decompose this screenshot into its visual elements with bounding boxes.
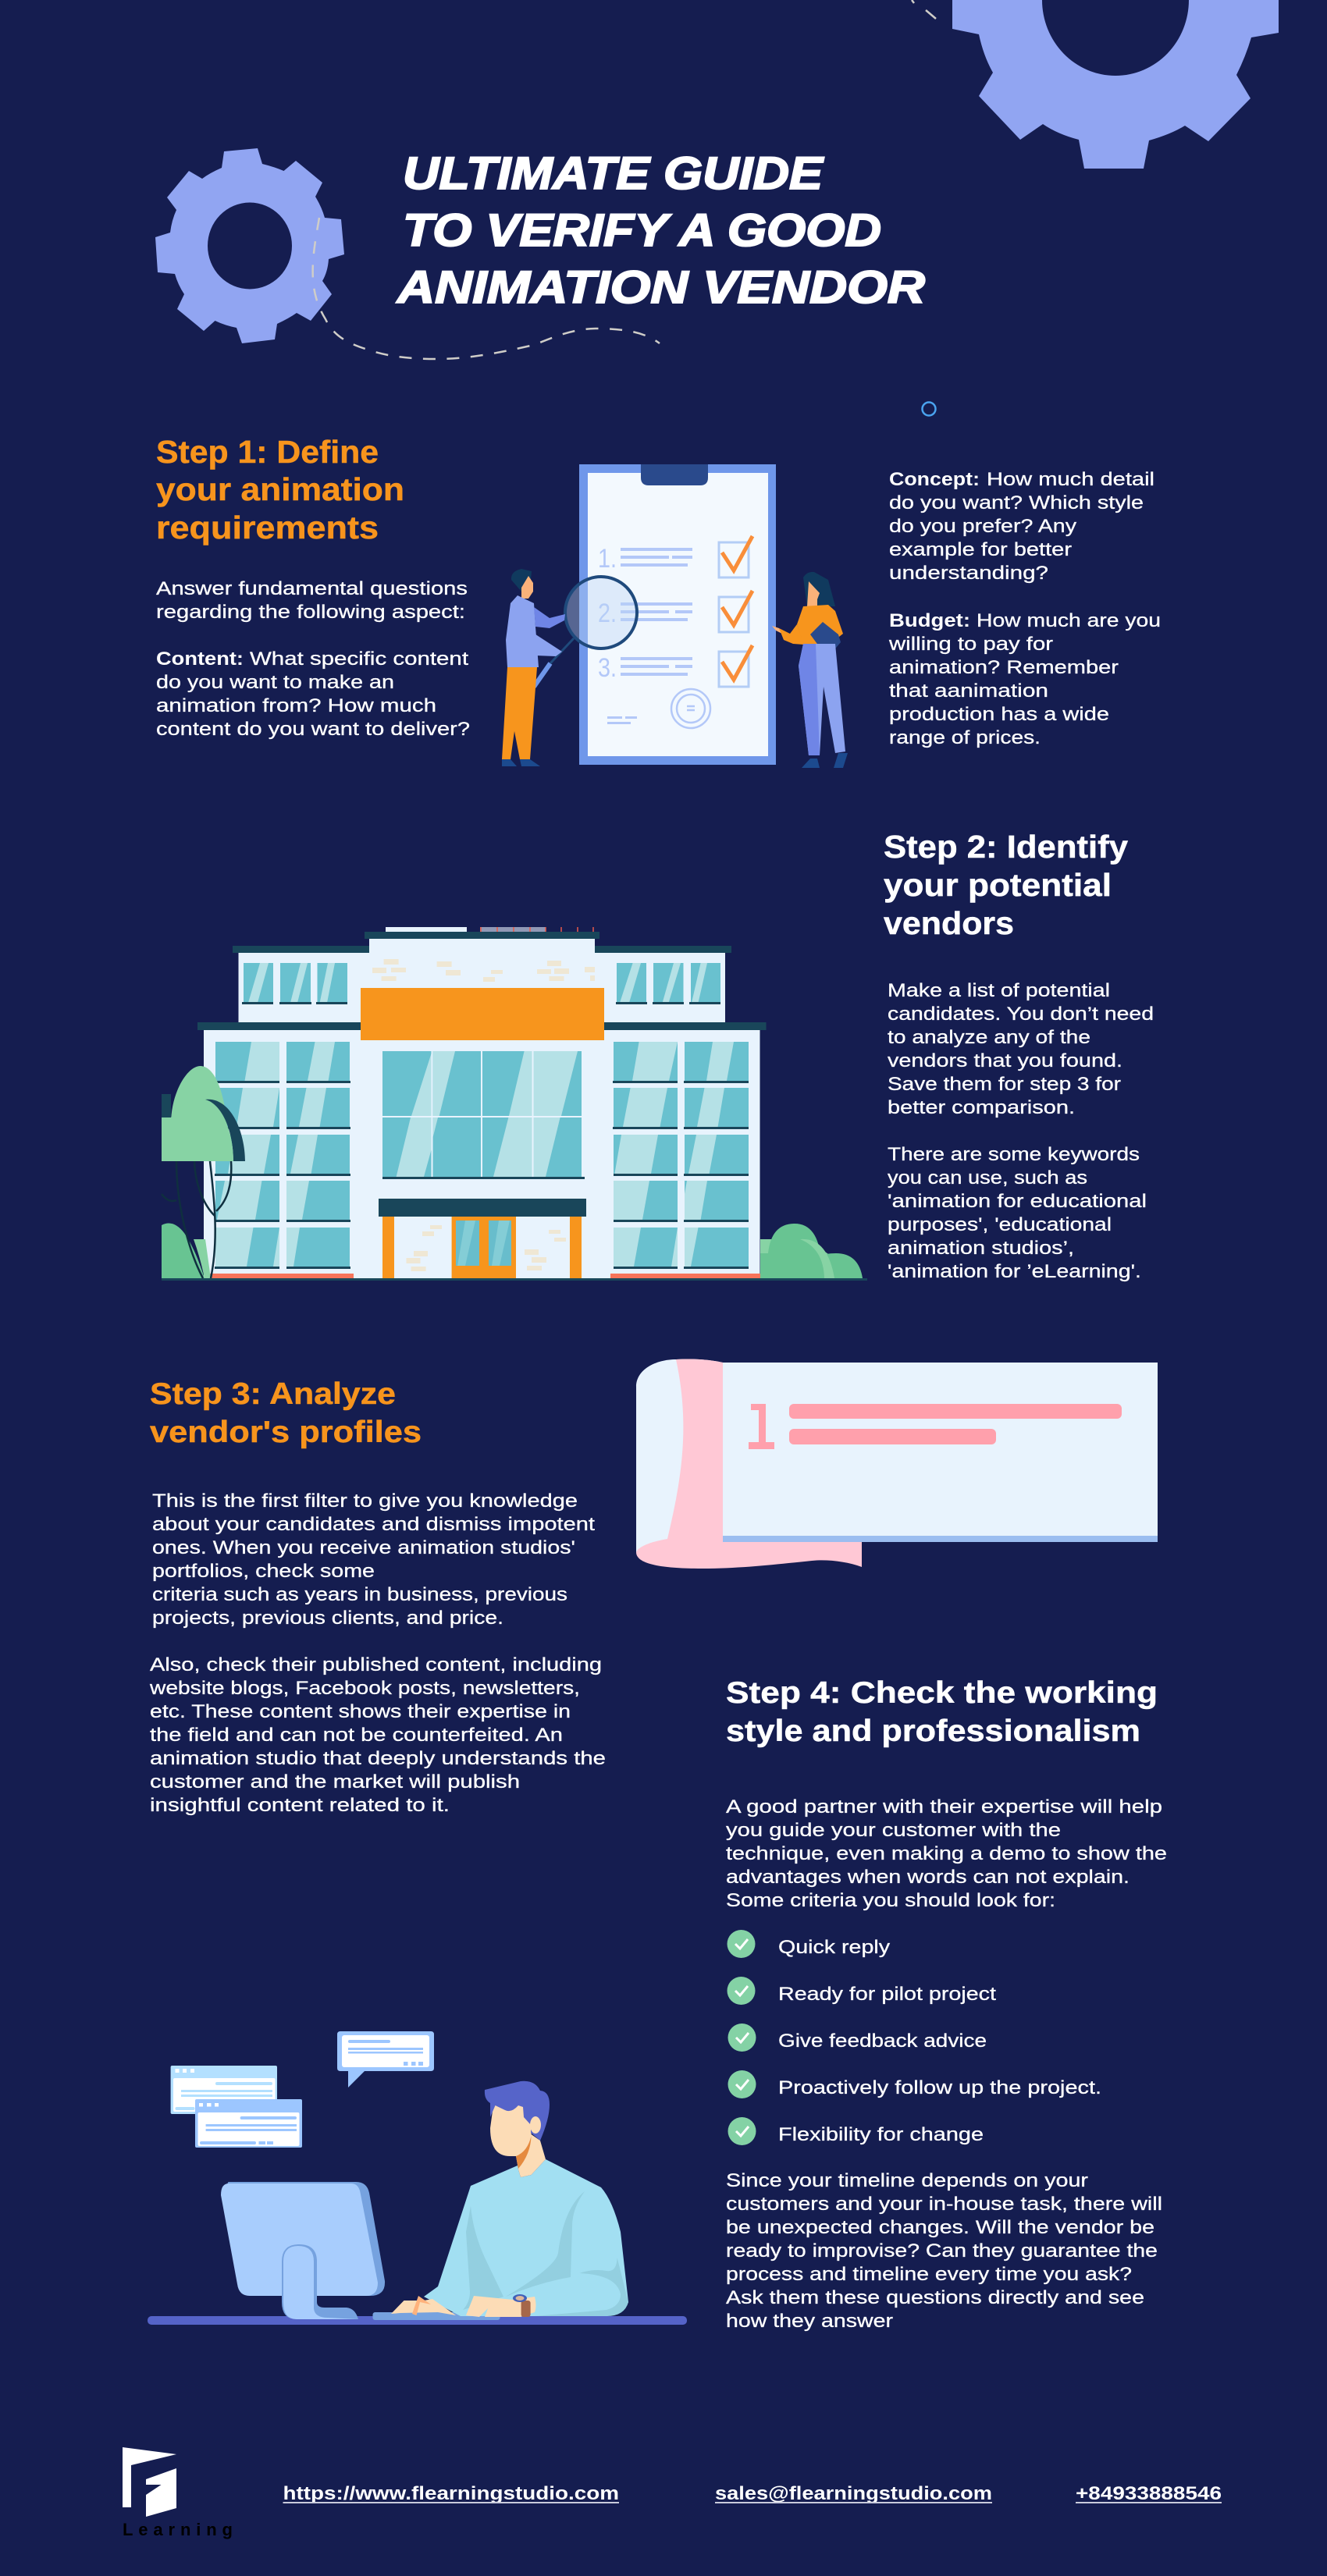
monitor: [221, 2182, 385, 2319]
text block: step 2: to analyze any of the: [888, 1027, 1090, 1048]
text block: step 3: criteria such as years in business, previous: [152, 1584, 567, 1605]
text block: step 3: insightful content related to it.: [150, 1795, 450, 1816]
illustration: checklist clipboard: 2.: [598, 599, 617, 628]
text block: step 3: website blogs, Facebook posts, newsletters,: [149, 1678, 580, 1699]
illustration: paper scroll: [636, 1359, 1158, 1569]
check item: flexibility: Flexibility for change: [778, 2124, 984, 2145]
heading: step 1: [156, 434, 404, 545]
text block: step 3: customer and the market will publish: [150, 1771, 520, 1793]
text block: step 4 closing: be unexpected changes. Will the vendor be: [726, 2217, 1154, 2238]
text block: step 4 closing: how they answer: [726, 2311, 893, 2332]
text block: step 4 intro: technique, even making a demo to show the: [726, 1843, 1167, 1864]
speech bubble: [337, 2031, 434, 2087]
check item: ready for pilot: [728, 1977, 996, 2005]
footer link: website: https://www.flearningstudio.com: [283, 2483, 619, 2504]
text block: concept and budget: [888, 469, 1161, 748]
text block: step 3: projects, previous clients, and price.: [152, 1608, 503, 1629]
text block: step 2: Save them for step 3 for: [888, 1074, 1121, 1095]
text block: step 3: Also, check their published content, including: [150, 1654, 602, 1675]
illustration: checklist clipboard: 1.: [598, 544, 617, 574]
text block: step 3: This is the first filter to give you knowledge: [152, 1491, 578, 1512]
icon: top right gear: [952, 0, 1279, 169]
text block: step 4 intro: [726, 1796, 1167, 1911]
text block: step 4 closing: Since your timeline depends on your: [726, 2170, 1088, 2191]
illustration: woman with tablet: [772, 572, 848, 768]
text block: concept and budget: production has a wide: [889, 704, 1109, 725]
check item: feedback advice: Give feedback advice: [778, 2031, 987, 2052]
front window: [195, 2099, 302, 2148]
text block: step 1 intro and content: Answer fundamental questions: [156, 578, 468, 599]
title: ULTIMATE GUIDE: [403, 148, 825, 199]
text block: step 4 closing: process and timeline every time you ask?: [726, 2264, 1132, 2285]
illustration: office building: [162, 927, 867, 1281]
heading: step 3: [150, 1377, 422, 1449]
back window: [171, 2066, 277, 2114]
checklist: criteria: [728, 1930, 1101, 2145]
check item: quick reply: Quick reply: [778, 1937, 891, 1958]
text block: step 4 intro: A good partner with their expertise will help: [726, 1796, 1162, 1817]
text block: step 1 intro and content: do you want to make an: [156, 672, 394, 693]
text block: concept and budget: willing to pay for: [888, 634, 1053, 655]
check item: follow up: Proactively follow up the project.: [778, 2077, 1101, 2098]
text block: step 3: [149, 1491, 606, 1816]
text block: step 2: better comparison.: [888, 1097, 1075, 1118]
text block: step 4 intro: advantages when words can not explain.: [726, 1867, 1130, 1888]
text block: concept and budget: Concept:: [889, 469, 980, 490]
text block: step 4 closing: ready to improvise? Can they guarantee the: [726, 2240, 1158, 2262]
text block: step 1 intro and content: animation from? How much: [156, 695, 436, 716]
logo: [123, 2447, 233, 2539]
illustration: chat windows: [171, 2031, 434, 2148]
check item: feedback advice: [728, 2023, 987, 2052]
text block: step 2: animation studios’,: [888, 1238, 1074, 1259]
text block: step 4 closing: Ask them these questions directly and see: [726, 2287, 1144, 2308]
footer link: email: sales@flearningstudio.com: [715, 2483, 992, 2504]
text block: concept and budget: How much are you: [977, 610, 1161, 631]
text block: concept and budget: animation? Remember: [889, 657, 1119, 678]
illustration: checklist clipboard: 3.: [598, 653, 617, 683]
heading: step 3: Step 3: Analyze: [150, 1377, 396, 1411]
illustration: man with magnifier: [502, 569, 637, 766]
text block: step 3: portfolios, check some: [152, 1561, 375, 1582]
heading: step 2: your potential: [884, 867, 1112, 903]
text block: step 4 intro: Some criteria you should look for:: [726, 1890, 1055, 1911]
person: [391, 2081, 628, 2317]
decorative dashes: top right: [912, 0, 936, 19]
heading: step 1: your animation: [156, 471, 404, 507]
text block: step 1 intro and content: regarding the following aspect:: [156, 602, 465, 623]
title: ANIMATION VENDOR: [396, 262, 925, 313]
check item: ready for pilot: Ready for pilot project: [778, 1984, 996, 2005]
text block: concept and budget: understanding?: [889, 563, 1048, 584]
text block: step 1 intro and content: Content:: [156, 648, 244, 670]
text block: concept and budget: example for better: [889, 539, 1072, 560]
text block: step 1 intro and content: What specific content: [250, 648, 468, 670]
heading: step 3: vendor's profiles: [150, 1416, 422, 1449]
text block: step 3: etc. These content shows their expertise in: [150, 1701, 571, 1722]
text block: concept and budget: that aanimation: [889, 680, 1048, 702]
text block: step 2: candidates. You don’t need: [888, 1004, 1154, 1025]
illustration: man at computer: [148, 2081, 687, 2325]
heading: step 2: [884, 829, 1128, 941]
text block: step 2: Make a list of potential: [888, 980, 1110, 1001]
text block: step 3: about your candidates and dismiss impotent: [152, 1514, 595, 1535]
check item: follow up: [728, 2070, 1101, 2098]
decorative dashed wave under title: [313, 218, 660, 359]
text block: step 2: There are some keywords: [888, 1144, 1140, 1165]
text block: step 2: 'animation for educational: [888, 1191, 1147, 1212]
text block: concept and budget: How much detail: [987, 469, 1154, 490]
text block: step 1 intro and content: content do you want to deliver?: [156, 719, 470, 740]
heading: step 4: Step 4: Check the working: [726, 1676, 1158, 1710]
keyboard: [373, 2312, 500, 2320]
heading: step 1: requirements: [156, 510, 379, 545]
heading: step 4: [726, 1676, 1158, 1748]
text block: step 3: ones. When you receive animation studios': [152, 1537, 575, 1558]
text block: step 2: you can use, such as: [888, 1167, 1087, 1189]
heading: step 2: vendors: [884, 905, 1014, 941]
illustration: checklist clipboard: [579, 464, 776, 765]
text block: step 2: vendors that you found.: [888, 1050, 1122, 1071]
title: [396, 148, 925, 313]
icon: title gear: [155, 148, 344, 343]
text block: step 1 intro and content: [156, 578, 470, 740]
text block: step 3: animation studio that deeply understands the: [150, 1748, 606, 1769]
heading: step 2: Step 2: Identify: [884, 829, 1128, 865]
heading: step 1: Step 1: Define: [156, 434, 379, 470]
footer link: phone: +84933888546: [1076, 2483, 1222, 2504]
check item: flexibility: [728, 2117, 984, 2145]
text block: concept and budget: Budget:: [889, 610, 970, 631]
text block: concept and budget: do you prefer? Any: [889, 516, 1077, 537]
text block: step 2: [888, 980, 1154, 1282]
text block: step 4 closing: customers and your in-house task, there will: [726, 2194, 1162, 2215]
check item: quick reply: [728, 1930, 891, 1958]
heading: step 4: style and professionalism: [726, 1714, 1140, 1748]
text block: concept and budget: range of prices.: [889, 727, 1041, 748]
desk: [148, 2316, 687, 2325]
decorative ring: [923, 403, 935, 415]
text block: concept and budget: do you want? Which style: [889, 492, 1144, 513]
text block: step 2: purposes', 'educational: [888, 1214, 1112, 1235]
text block: step 4 intro: you guide your customer with the: [726, 1820, 1061, 1841]
logo: Learning: [123, 2520, 233, 2539]
title: TO VERIFY A GOOD: [403, 205, 881, 256]
text block: step 3: the field and can not be counterfeited. An: [150, 1725, 563, 1746]
text block: step 2: 'animation for ’eLearning'.: [888, 1261, 1141, 1282]
text block: step 4 closing: [726, 2170, 1162, 2332]
